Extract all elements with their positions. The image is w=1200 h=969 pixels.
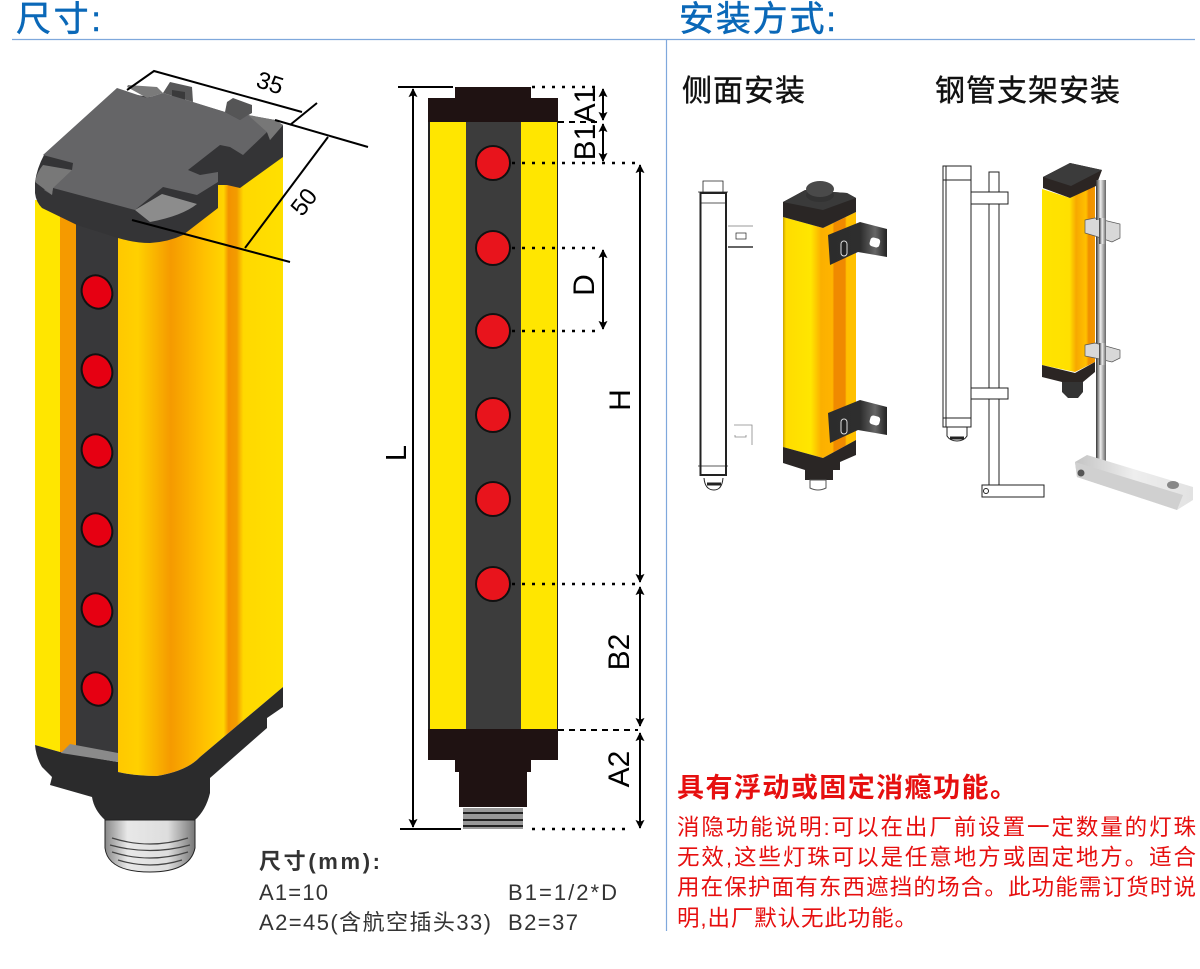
front view lights — [476, 146, 510, 601]
callout body: 用在保护面有东西遮挡的场合。此功能需订货时说 — [677, 875, 1196, 900]
tube mount sensor — [1042, 163, 1193, 510]
steel tube and clamps — [1085, 180, 1120, 466]
top face — [43, 88, 283, 210]
label: A2: A2 — [603, 751, 636, 787]
dimension values — [259, 849, 617, 935]
callout body — [677, 815, 1196, 931]
callout heading: 具有浮动或固定消瘾功能。 — [677, 773, 1017, 803]
dimension lines — [127, 71, 368, 262]
label: 50: 50 — [286, 183, 323, 221]
top plates — [35, 165, 72, 195]
bottom cap and connector — [35, 687, 283, 872]
heading: installation methods: 安装方式: — [679, 0, 836, 39]
3D sensor illustration with dimensions — [35, 67, 368, 872]
sensor body — [35, 150, 283, 776]
steel tube bracket mounting title: 钢管支架安装 — [935, 75, 1120, 108]
indicator lights — [76, 270, 118, 711]
dimension values: B2=37 — [508, 910, 578, 935]
back tabs — [163, 82, 193, 102]
front view sensor — [428, 87, 558, 829]
dimension values: A1=10 — [259, 880, 328, 905]
side mount sensor — [783, 181, 887, 490]
callout body: 无效,这些灯珠可以是任意地方或固定地方。适合 — [677, 845, 1196, 870]
mounting brackets — [828, 222, 887, 443]
side mount outline drawing — [698, 181, 753, 490]
back plate — [127, 85, 163, 98]
dimension values: 尺寸(mm): — [259, 849, 380, 874]
label: L: L — [381, 445, 413, 461]
label: B1: B1 — [569, 124, 602, 160]
callout body: 明,出厂默认无此功能。 — [677, 906, 917, 931]
label: D: D — [568, 274, 601, 296]
top cap — [35, 82, 283, 243]
label: B2: B2 — [603, 634, 636, 670]
label: 35: 35 — [253, 67, 287, 100]
tube mount outline drawing — [943, 166, 1044, 497]
label: A1: A1 — [569, 87, 602, 123]
feature callout — [677, 773, 1196, 931]
label: H: H — [604, 389, 637, 411]
heading: dimensions: 尺寸: — [16, 0, 101, 39]
side mounting title: 侧面安装 — [682, 75, 805, 108]
callout body: 消隐功能说明:可以在出厂前设置一定数量的灯珠 — [677, 815, 1196, 840]
dimension values: B1=1/2*D — [508, 880, 617, 905]
steel base — [1075, 455, 1193, 510]
dimension arrows and guides — [398, 87, 640, 829]
front view dimension drawing — [381, 87, 640, 829]
cap side walls — [35, 92, 283, 243]
dimension values: A2=45(含航空插头33) — [259, 910, 491, 935]
